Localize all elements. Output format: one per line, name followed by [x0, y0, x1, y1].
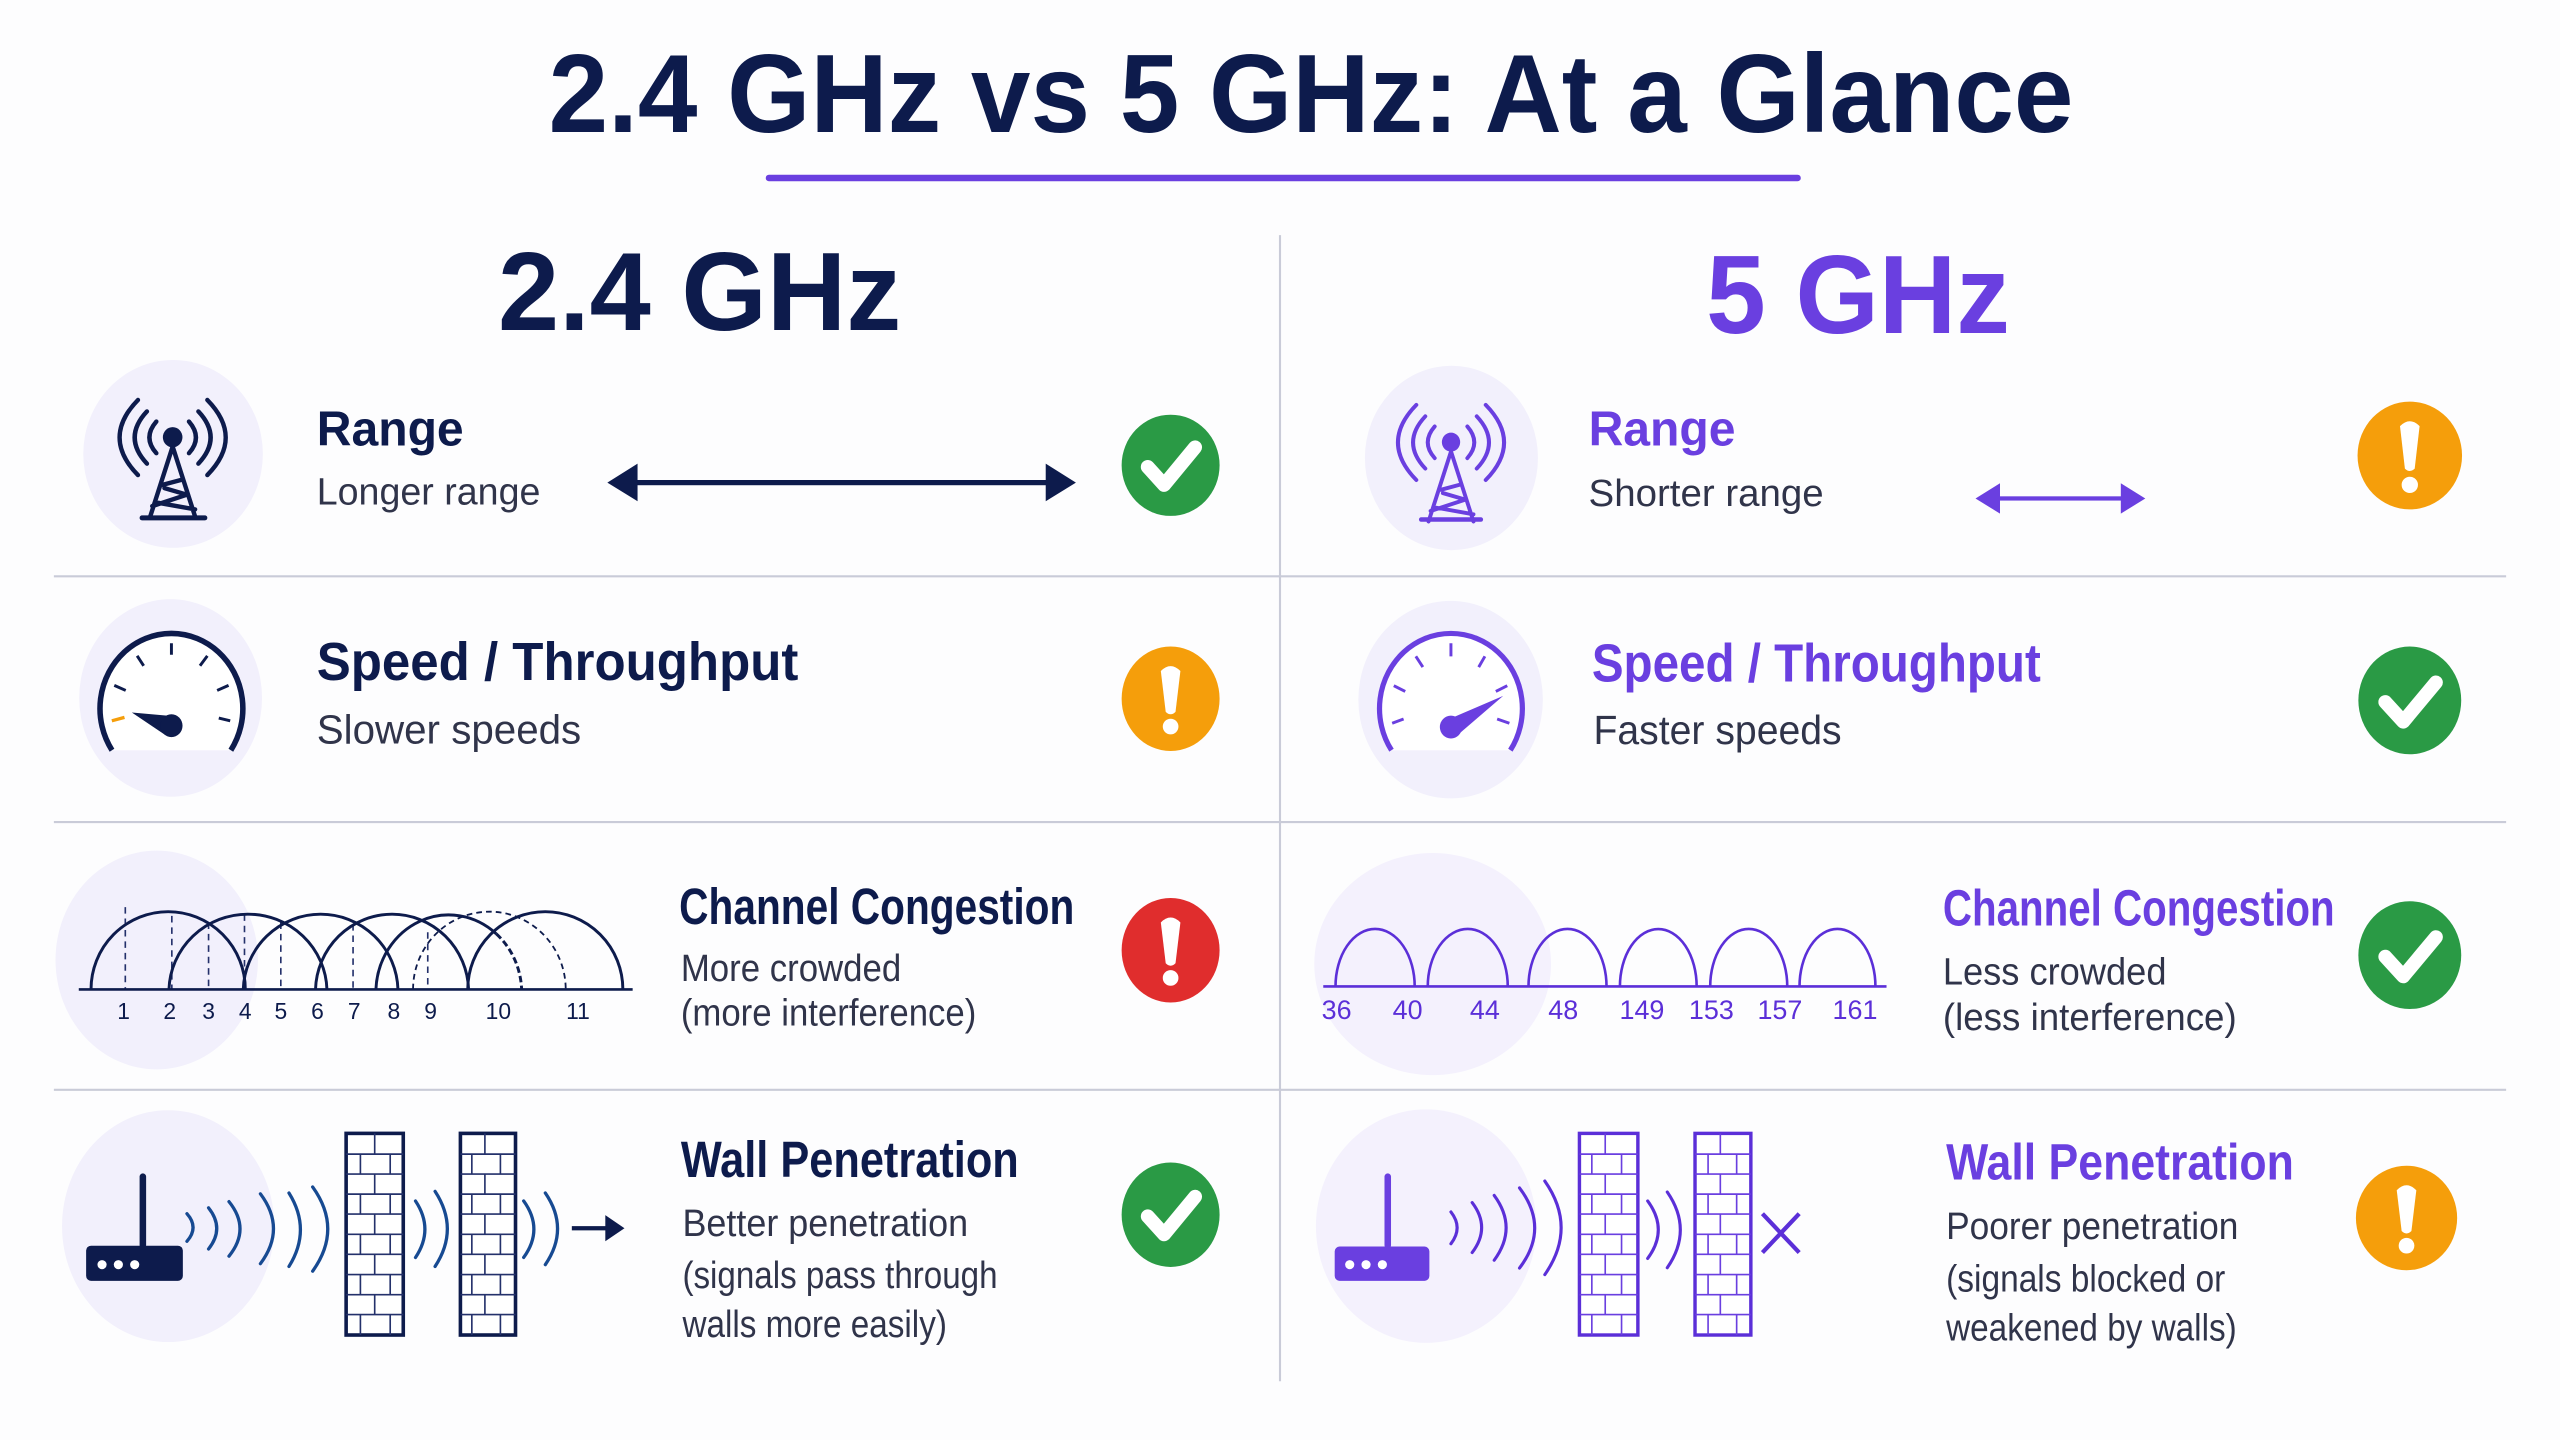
- text: more interference: (more interference): [681, 991, 976, 1034]
- chart: overlapping 2.4 GHz channels: 6: [311, 998, 324, 1024]
- chart: separated 5 GHz channels: 36: [1322, 995, 1352, 1025]
- chart: overlapping 2.4 GHz channels: 2: [163, 998, 176, 1024]
- chart: overlapping 2.4 GHz channels: 10: [486, 998, 511, 1024]
- text: Better penetration: Better penetration: [682, 1202, 968, 1245]
- icon: check: [2358, 647, 2461, 754]
- text: walls more easily: walls more easily): [682, 1303, 947, 1346]
- text: More crowded: More crowded: [681, 947, 901, 990]
- row: 5 GHz channel congestion: [1314, 853, 2461, 1075]
- chart: overlapping 2.4 GHz channels: [56, 851, 633, 1069]
- chart: overlapping 2.4 GHz channels: 8: [388, 998, 400, 1024]
- chart: separated 5 GHz channels: 40: [1393, 995, 1423, 1025]
- label: Wall Penetration: Wall Penetration: [681, 1131, 1019, 1188]
- chart: overlapping 2.4 GHz channels: 7: [348, 998, 361, 1024]
- label: Speed / Throughput: Speed / Throughput: [1592, 634, 2041, 694]
- chart: overlapping 2.4 GHz channels: 1: [117, 998, 130, 1024]
- icon: cell tower: [83, 360, 263, 548]
- icon: check: [1122, 415, 1220, 516]
- text: less interference: (less interference): [1943, 996, 2237, 1039]
- heading: 2.4 GHz: 2.4 GHz: [498, 229, 901, 354]
- title: 2.4 GHz vs 5 GHz: At a Glance: [549, 31, 2073, 156]
- chart: separated 5 GHz channels: 48: [1548, 995, 1578, 1025]
- chart: overlapping 2.4 GHz channels: 11: [566, 998, 590, 1024]
- icon: check: [2358, 901, 2461, 1009]
- icon: alert: [1122, 898, 1220, 1002]
- icon: cell tower: [1365, 366, 1538, 550]
- icon: warning: [2356, 1166, 2457, 1270]
- row: 2.4 GHz wall penetration: [62, 1110, 1220, 1346]
- illustration: router signal through walls: [62, 1110, 624, 1342]
- chart: overlapping 2.4 GHz channels: 4: [239, 998, 252, 1024]
- arrow: long range: [607, 464, 1076, 501]
- text: Poorer penetration: Poorer penetration: [1946, 1205, 2238, 1248]
- chart: overlapping 2.4 GHz channels: 9: [424, 998, 437, 1024]
- text: signals blocked or: (signals blocked or: [1946, 1257, 2225, 1300]
- row: 2.4 GHz range: [83, 360, 1220, 548]
- text: weakened by walls: weakened by walls): [1945, 1306, 2237, 1349]
- text: Faster speeds: Faster speeds: [1593, 707, 1842, 753]
- row: 5 GHz wall penetration: [1316, 1109, 2457, 1349]
- chart: separated 5 GHz channels: 44: [1470, 995, 1500, 1025]
- chart: overlapping 2.4 GHz channels: 3: [202, 998, 215, 1024]
- row: 2.4 GHz channel congestion: [56, 851, 1220, 1069]
- panel: 2.4 GHz column: [56, 360, 1220, 1346]
- text: Less crowded: Less crowded: [1943, 950, 2167, 993]
- icon: warning: [1122, 647, 1220, 751]
- label: Channel Congestion: Channel Congestion: [1943, 880, 2335, 937]
- icon: warning: [2358, 402, 2462, 509]
- chart: separated 5 GHz channels: 157: [1757, 995, 1802, 1025]
- chart: overlapping 2.4 GHz channels: 5: [274, 998, 287, 1024]
- chart: separated 5 GHz channels: 153: [1689, 995, 1734, 1025]
- chart: separated 5 GHz channels: [1314, 853, 1887, 1075]
- arrow: short range: [1976, 483, 2145, 514]
- text: Longer range: Longer range: [317, 470, 540, 513]
- label: Speed / Throughput: Speed / Throughput: [317, 632, 798, 692]
- row: 2.4 GHz speed: [79, 599, 1220, 797]
- row: 5 GHz speed: [1358, 601, 2461, 798]
- icon: slow speedometer: [79, 599, 262, 797]
- row: 5 GHz range: [1365, 366, 2462, 550]
- title underline: [769, 176, 1798, 180]
- label: Wall Penetration: Wall Penetration: [1946, 1134, 2294, 1191]
- chart: separated 5 GHz channels: 161: [1833, 995, 1877, 1025]
- text: signals pass through: (signals pass through: [682, 1254, 998, 1297]
- icon: fast speedometer: [1358, 601, 1543, 798]
- heading: 5 GHz: 5 GHz: [1706, 232, 2010, 357]
- label: Range: Range: [1589, 403, 1736, 457]
- illustration: router signal blocked by walls: [1316, 1109, 1799, 1343]
- text: Slower speeds: Slower speeds: [317, 707, 581, 753]
- panel: 5 GHz column: [1314, 366, 2462, 1349]
- chart: separated 5 GHz channels: 149: [1619, 995, 1664, 1025]
- label: Range: Range: [317, 403, 464, 457]
- icon: check: [1122, 1162, 1220, 1267]
- label: Channel Congestion: Channel Congestion: [679, 878, 1074, 935]
- text: Shorter range: Shorter range: [1589, 472, 1824, 515]
